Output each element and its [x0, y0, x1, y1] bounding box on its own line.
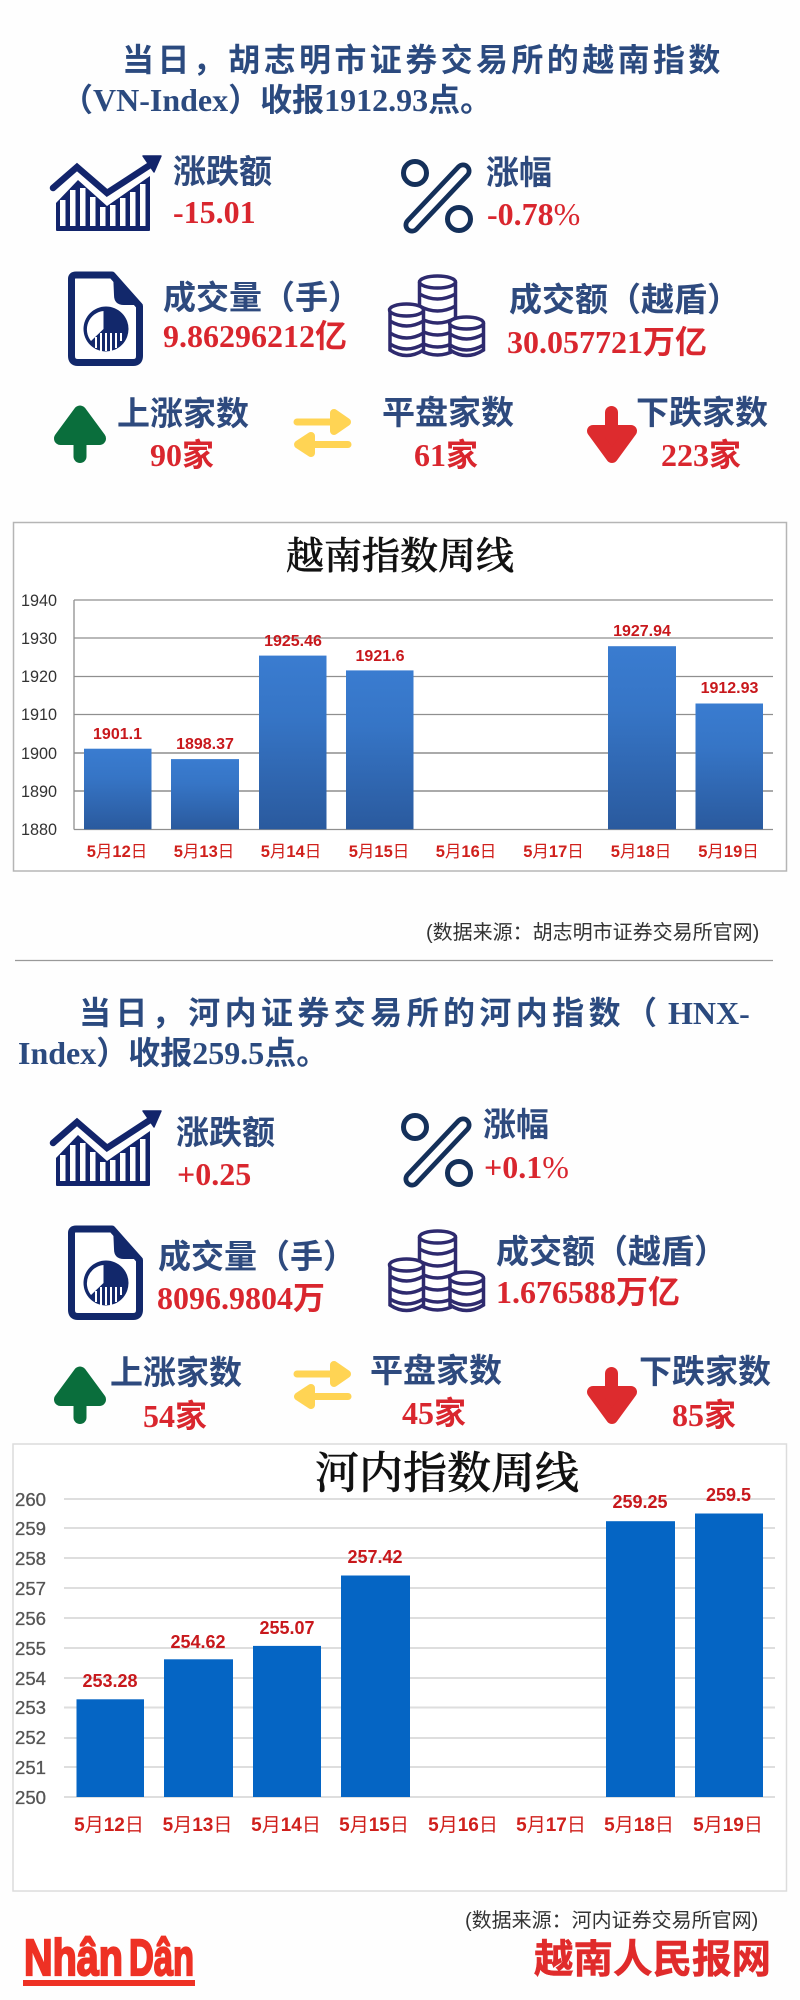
x axis date labels: 5月13日 — [163, 1815, 232, 1836]
stat: unchanged: 平盘家数 — [370, 1353, 502, 1390]
bars — [84, 646, 763, 829]
data labels: 253.28 — [82, 1671, 138, 1691]
y axis labels: 1930 — [21, 630, 57, 648]
stat: turnover: 成交额（越盾） — [496, 1234, 727, 1271]
stat: unchanged: 45家 — [402, 1395, 466, 1431]
x axis date labels — [87, 843, 759, 861]
y axis labels: 1940 — [21, 592, 57, 610]
stat: turnover: 1.676588万亿 — [496, 1274, 680, 1310]
y axis labels — [15, 1489, 46, 1808]
icon: percent — [404, 1116, 470, 1184]
panel: HNX-Index weekly bar chart — [13, 1437, 786, 1891]
stat: advancers — [117, 396, 249, 473]
stat: change amount: 涨跌额 — [176, 1115, 275, 1152]
stat: turnover: 30.057721万亿 — [507, 324, 707, 360]
data labels: 1912.93 — [701, 680, 759, 697]
stat: unchanged — [370, 1353, 502, 1431]
x axis date labels: 5月17日 — [516, 1815, 586, 1836]
stat: change amount: -15.01 — [173, 194, 256, 230]
stat: advancers: 上涨家数 — [110, 1355, 242, 1392]
heading: VN-Index close — [61, 42, 724, 118]
logo: Nhan Dan: Nhân — [24, 1929, 123, 1986]
icon: coin stacks — [390, 276, 484, 356]
stat: change percent — [486, 155, 580, 232]
icon: green up arrow — [60, 412, 100, 463]
stat: volume — [157, 1239, 356, 1316]
y axis labels: 256 — [15, 1608, 46, 1629]
stat: change amount: 涨跌额 — [173, 154, 272, 191]
logo: Nhan Dan: Dân — [129, 1929, 194, 1986]
stat: change percent: +0.1% — [484, 1149, 569, 1185]
data labels: 254.62 — [170, 1632, 226, 1652]
panel: VN-Index weekly bar chart — [14, 522, 786, 871]
icon: yellow two-way arrows — [297, 1365, 348, 1405]
stat: advancers: 54家 — [143, 1398, 207, 1434]
stat: turnover: 成交额（越盾） — [509, 282, 740, 319]
stat: change amount — [176, 1115, 275, 1192]
icon: document with pie chart — [72, 1226, 143, 1316]
stat: volume — [163, 280, 361, 354]
y axis labels: 257 — [15, 1578, 46, 1599]
y axis labels: 259 — [15, 1518, 46, 1539]
x axis date labels: 5月17日 — [523, 843, 584, 861]
data labels: 259.5 — [706, 1485, 751, 1505]
stat: advancers — [110, 1355, 242, 1434]
icon: red down arrow — [593, 1367, 631, 1418]
stat: change percent: 涨幅 — [486, 155, 552, 192]
heading: VN-Index close: 当日，胡志明市证券交易所的越南指数 — [122, 42, 724, 78]
x axis date labels: 5月19日 — [693, 1815, 763, 1836]
y axis labels: 1920 — [21, 668, 57, 686]
icon: yellow two-way arrows — [297, 413, 348, 453]
x axis date labels: 5月14日 — [261, 843, 321, 861]
y axis labels: 253 — [15, 1697, 46, 1718]
icon: document with pie chart — [72, 272, 143, 362]
icon: rising line chart — [53, 156, 161, 231]
x axis date labels: 5月13日 — [174, 843, 234, 861]
stat: volume: 8096.9804万 — [157, 1280, 325, 1316]
data labels: 1921.6 — [356, 648, 405, 665]
stat: volume: 9.86296212亿 — [163, 318, 347, 354]
stat: unchanged: 平盘家数 — [382, 395, 514, 432]
stat: turnover — [496, 1234, 727, 1310]
bars — [76, 1514, 763, 1797]
stat: change percent — [483, 1107, 569, 1185]
x axis date labels: 5月12日 — [87, 843, 147, 861]
y axis labels: 1900 — [21, 745, 57, 763]
panel: HOSE VN-Index summary — [53, 42, 768, 473]
stat: advancers: 90家 — [150, 437, 214, 473]
data labels: 257.42 — [347, 1547, 403, 1567]
x axis date labels: 5月14日 — [251, 1815, 321, 1836]
y axis labels: 252 — [15, 1727, 46, 1748]
x axis date labels: 5月19日 — [698, 843, 759, 861]
x axis date labels: 5月18日 — [604, 1815, 674, 1836]
x axis date labels — [74, 1815, 763, 1836]
y axis labels: 255 — [15, 1638, 46, 1659]
y axis labels: 1890 — [21, 783, 57, 801]
data labels — [93, 623, 759, 753]
panel: HNX-Index summary — [18, 995, 771, 1434]
data labels: 1927.94 — [613, 623, 671, 640]
stat: change amount: +0.25 — [177, 1156, 251, 1192]
stat: change percent: -0.78% — [487, 196, 580, 232]
stat: change amount — [173, 154, 272, 230]
icon: coin stacks — [390, 1231, 484, 1310]
data labels: 1898.37 — [176, 736, 234, 753]
stat: volume: 成交量（手） — [158, 1239, 356, 1276]
x axis date labels: 5月15日 — [349, 843, 409, 861]
icon: red down arrow — [593, 406, 631, 457]
chart title: 越南指数周线 — [286, 525, 514, 580]
stat: decliners: 85家 — [672, 1397, 736, 1433]
x axis date labels: 5月18日 — [611, 843, 671, 861]
stat: advancers: 上涨家数 — [117, 396, 249, 433]
chart title: 河内指数周线 — [315, 1437, 579, 1501]
heading: HNX-Index close: 当日，河内证券交易所的河内指数（ — [79, 995, 661, 1031]
data labels: 1901.1 — [93, 726, 142, 743]
stat: decliners: 下跌家数 — [639, 1354, 771, 1391]
stat: decliners: 下跌家数 — [636, 395, 768, 432]
icon: green up arrow — [60, 1373, 100, 1424]
source note: HOSE: (数据来源：胡志明市证券交易所官网) — [426, 921, 759, 944]
data labels: 1925.46 — [264, 633, 322, 650]
heading: HNX-Index close: HNX- — [668, 995, 750, 1031]
icon: percent — [404, 162, 470, 230]
y axis labels: 258 — [15, 1548, 46, 1569]
heading: HNX-Index close: Index）收报259.5点。 — [18, 1035, 328, 1071]
y axis labels — [21, 592, 57, 839]
y axis labels: 260 — [15, 1489, 46, 1510]
y axis labels: 254 — [15, 1668, 46, 1689]
logo: 越南人民报网: 越南人民报网 — [534, 1938, 771, 1982]
stat: decliners — [639, 1354, 771, 1433]
x axis date labels: 5月16日 — [428, 1815, 498, 1836]
stat: change percent: 涨幅 — [483, 1107, 549, 1144]
stat: decliners — [636, 395, 768, 473]
x axis date labels: 5月12日 — [74, 1815, 144, 1836]
data labels: 259.25 — [612, 1492, 668, 1512]
y axis labels: 1910 — [21, 706, 57, 724]
stat: turnover — [507, 282, 740, 360]
stat: volume: 成交量（手） — [163, 280, 361, 317]
data labels: 255.07 — [259, 1618, 315, 1638]
icon: rising line chart — [53, 1111, 161, 1186]
data labels — [82, 1485, 751, 1691]
stat: decliners: 223家 — [661, 437, 741, 473]
x axis date labels: 5月15日 — [339, 1815, 409, 1836]
source note: HNX: (数据来源：河内证券交易所官网) — [465, 1909, 758, 1932]
heading: VN-Index close: （VN-Index）收报1912.93点。 — [61, 82, 492, 118]
stat: unchanged: 61家 — [414, 437, 478, 473]
y axis labels: 251 — [15, 1757, 46, 1778]
x axis date labels: 5月16日 — [436, 843, 496, 861]
heading: HNX-Index close — [18, 995, 750, 1071]
y axis labels: 1880 — [21, 821, 57, 839]
stat: unchanged — [382, 395, 514, 473]
y axis labels: 250 — [15, 1787, 46, 1808]
